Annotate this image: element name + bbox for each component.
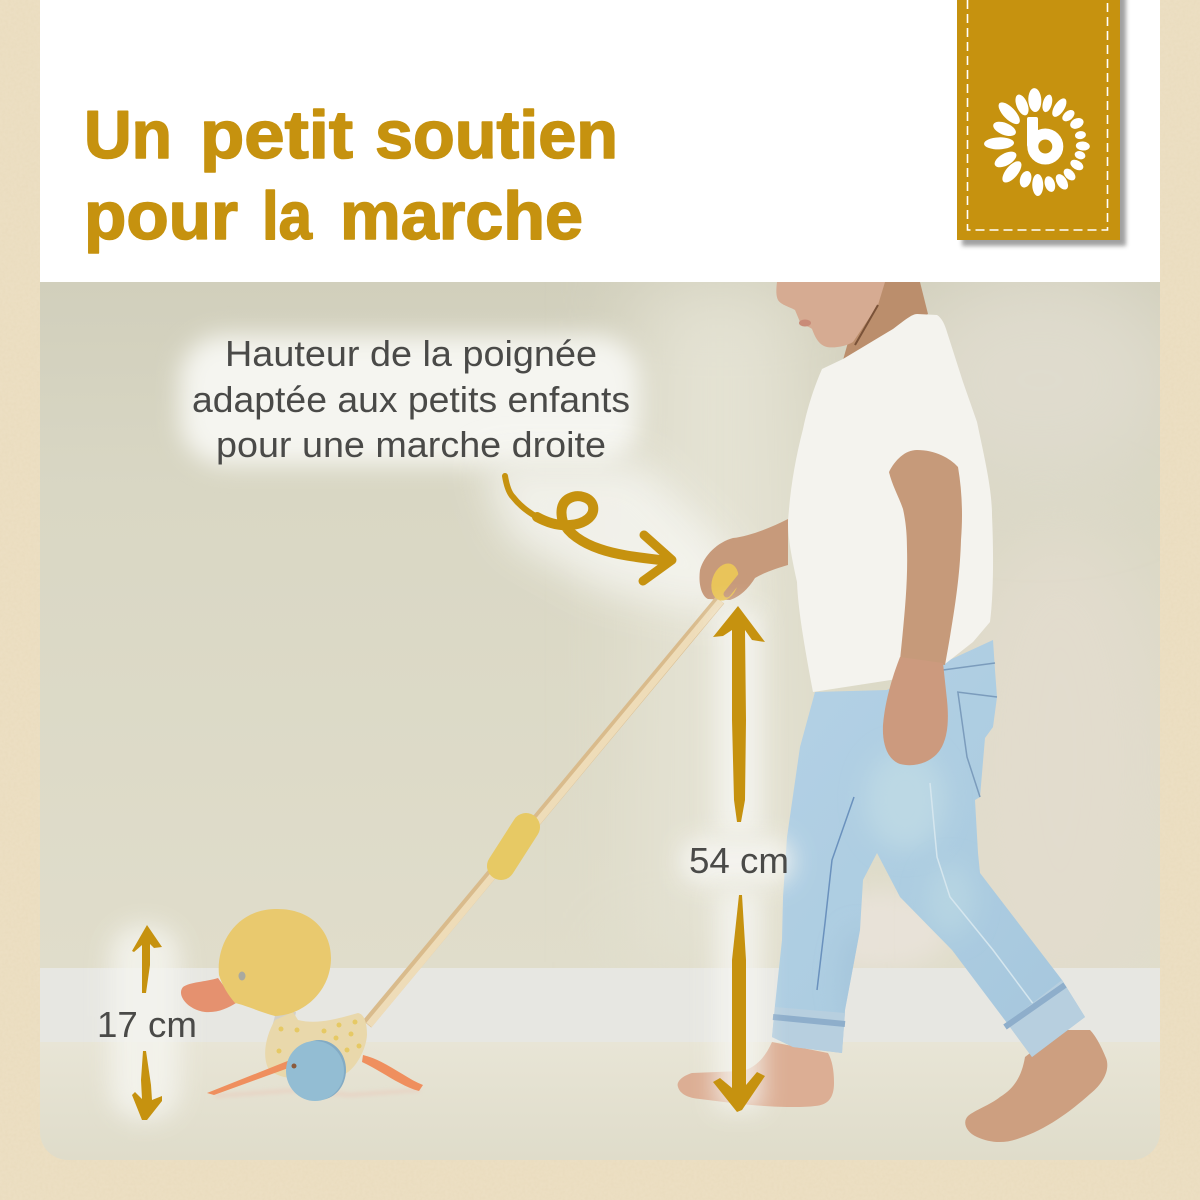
brand tag with logo: [957, 0, 1126, 246]
title: la: [262, 178, 313, 254]
icon: sunflower logo: [984, 88, 1090, 196]
push stick: [367, 560, 743, 1025]
face: [776, 282, 885, 347]
lips: [799, 320, 811, 326]
jeans: [772, 640, 1085, 1057]
far arm with hand: [699, 519, 788, 600]
callout text: adaptée aux petits enfants: [192, 379, 630, 420]
front foot: [965, 1030, 1107, 1142]
title: pour: [84, 178, 238, 254]
callout glow: [110, 335, 750, 1120]
jeans seams and pocket: [817, 663, 1043, 1017]
label: 54 cm: 54 cm: [689, 840, 789, 881]
title: Un: [84, 97, 172, 173]
callout text: [192, 333, 630, 465]
eye: [238, 972, 246, 980]
duck toy: [181, 909, 423, 1101]
body dots: [276, 1020, 362, 1054]
arrow: 54 cm up: [713, 606, 765, 822]
hand: [883, 657, 948, 765]
left foot ribbon: [207, 1060, 294, 1095]
arrow: 17 cm up: [132, 925, 162, 993]
child figure: [678, 282, 1107, 1142]
neck: [843, 282, 928, 360]
white t-shirt: [788, 314, 993, 692]
callout text: Hauteur de la poignée: [225, 333, 597, 374]
duck head: [219, 909, 331, 1016]
arrow: 54 cm down: [713, 895, 765, 1112]
header panel: [40, 0, 1160, 282]
thumb: [727, 574, 743, 594]
arrow: 17 cm down: [132, 1051, 162, 1120]
title: marche: [340, 178, 583, 254]
54 cm arrow glow: [680, 610, 792, 1110]
rear foot: [678, 1042, 834, 1107]
callout text: pour une marche droite: [216, 424, 606, 465]
right foot ribbon: [362, 1055, 423, 1091]
near arm: [889, 450, 962, 665]
floor: [40, 1042, 1160, 1160]
neck: [273, 1012, 296, 1023]
jeans cuffs: [772, 1007, 845, 1053]
stick sleeve: [501, 827, 526, 866]
jaw shadow: [855, 305, 878, 345]
title: petit: [200, 97, 353, 173]
floor shadow under duck: [215, 1090, 420, 1096]
arrow: curly pointer to handle: [505, 476, 672, 581]
title: soutien: [375, 97, 618, 173]
baseboard: [40, 968, 1160, 1043]
wheel: [310, 1040, 346, 1100]
photo panel: child with push duck: [40, 270, 1180, 1160]
handle ball: [711, 564, 738, 600]
label: 17 cm: 17 cm: [97, 1004, 197, 1045]
duck body: [265, 1012, 367, 1078]
beak: [181, 978, 236, 1012]
title: [84, 97, 618, 254]
